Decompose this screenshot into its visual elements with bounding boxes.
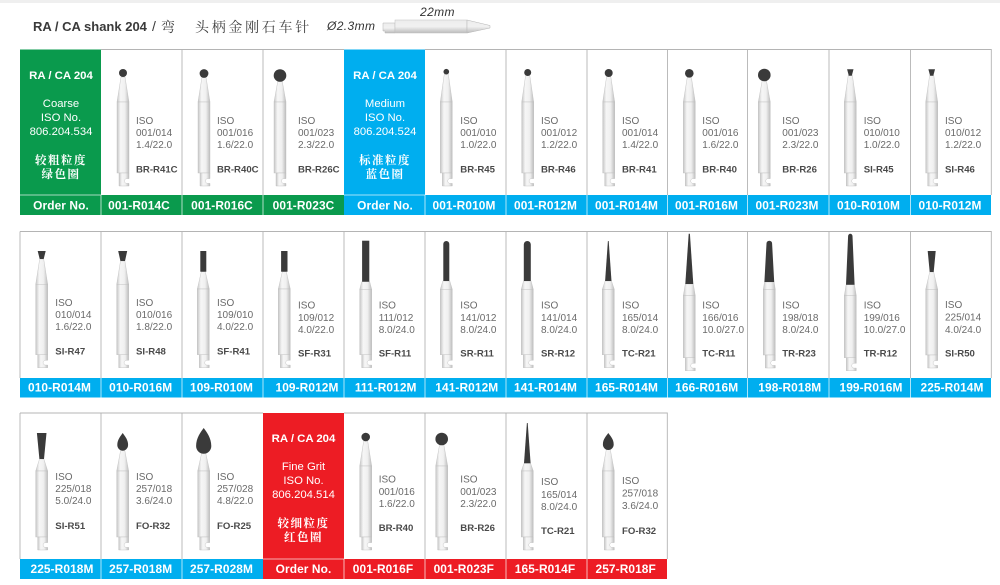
bur BR-R26 fine: 001/023 (460, 487, 497, 498)
bur BR-R41C (117, 69, 178, 186)
bur FO-R32 (117, 433, 173, 550)
bur BR-R40C: 001/016 (217, 128, 254, 139)
bur BR-R26 fine (435, 433, 497, 550)
bur SF-R31 (278, 251, 335, 368)
bur BR-R40C: BR-R40C (217, 165, 259, 176)
order number bar: medium: 001-R023M (755, 198, 819, 212)
bur BR-R40: 1.6/22.0 (702, 140, 739, 151)
order number bar: row 2: 109-R012M (275, 380, 339, 394)
bur BR-R40C (198, 69, 259, 186)
bur SR-R12: SR-R12 (541, 349, 575, 360)
bur TR-R12 (844, 234, 906, 371)
bur SI-R46: 1.2/22.0 (945, 140, 982, 151)
order number bar: row 2: 198-R018M (758, 380, 821, 394)
bur BR-R41 (603, 69, 659, 186)
bur FO-R32 fine: 3.6/24.0 (622, 501, 659, 512)
bur BR-R41C: ISO (136, 116, 153, 127)
bur SI-R46: SI-R46 (945, 165, 975, 176)
bur SR-R11: SR-R11 (460, 349, 495, 360)
bur BR-R41: 1.4/22.0 (622, 140, 659, 151)
panel: row 1 coarse and medium burs (20, 50, 991, 215)
bur BR-R26C: ISO (298, 116, 315, 127)
panel: coarse header: ISO No. (41, 112, 81, 124)
bur SR-R11: 141/012 (460, 313, 497, 324)
bur TC-R21 fine: 165/014 (541, 490, 578, 501)
bur SR-R12 (521, 241, 578, 368)
order number bar: medium: 001-R012M (514, 198, 577, 212)
bur BR-R26: BR-R26 (782, 165, 817, 176)
panel: fine grit header: 较细粒度 (278, 516, 330, 530)
bur SI-R51: 5.0/24.0 (55, 496, 92, 507)
order number bar: row 3 fine (344, 559, 667, 579)
bur BR-R40: 001/016 (702, 128, 739, 139)
order number bar: row 2: 010-R014M (28, 380, 91, 394)
bur BR-R41C: BR-R41C (136, 165, 178, 176)
bur BR-R40 fine: 001/016 (379, 487, 415, 498)
bur SI-R46: 010/012 (945, 128, 982, 139)
bur FO-R25: ISO (217, 472, 234, 483)
order number bar: row 2: 141-R012M (435, 380, 498, 394)
bur SI-R47: 1.6/22.0 (55, 322, 92, 333)
bur SF-R11: 8.0/24.0 (379, 325, 415, 336)
bur SI-R50 (926, 251, 982, 368)
order number bar: row 3 medium: 257-R028M (190, 562, 253, 576)
bur BR-R45: 001/010 (460, 128, 497, 139)
bur TC-R21: ISO (622, 300, 639, 312)
order number bar: row 3 fine: 257-R018F (596, 562, 656, 576)
bur SI-R45 (844, 69, 900, 186)
bur BR-R26 fine: ISO (460, 475, 478, 486)
icon: horizontal shank diagram (383, 20, 490, 33)
bur SF-R31: SF-R31 (298, 349, 332, 360)
panel: medium header: Order No. (357, 198, 413, 212)
bur TC-R21 fine: TC-R21 (541, 526, 575, 537)
panel: fine grit header: ISO No. (283, 475, 324, 487)
bur TC-R21 fine: 8.0/24.0 (541, 502, 578, 513)
bur TR-R12: 10.0/27.0 (864, 325, 906, 336)
bur SI-R45: ISO (864, 116, 881, 127)
bur SF-R31: ISO (298, 300, 315, 312)
panel: fine grit header: 806.204.514 (272, 489, 335, 501)
order number bar: medium: 001-R014M (595, 198, 658, 212)
bur SI-R50: SI-R50 (945, 349, 975, 360)
bur FO-R32: 3.6/24.0 (136, 496, 173, 507)
bur BR-R46: 001/012 (541, 128, 578, 139)
panel: fine grit header: RA / CA 204 (272, 433, 336, 445)
title: 弯 (161, 20, 175, 36)
bur TR-R12: 199/016 (864, 313, 900, 324)
shank length label: 22mm (419, 5, 455, 19)
bur SF-R11: 111/012 (379, 313, 414, 324)
bur BR-R40: ISO (702, 116, 720, 127)
panel: coarse header: Coarse (43, 98, 79, 110)
order number bar: coarse: 001-R016C (191, 198, 253, 212)
order number bar: row 3 medium: 257-R018M (109, 562, 172, 576)
order number bar: row 3 medium (20, 559, 263, 579)
order number bar: medium: 010-R012M (918, 198, 982, 212)
bur SR-R11: 8.0/24.0 (460, 325, 497, 336)
bur BR-R46: ISO (541, 116, 558, 127)
bur BR-R45: ISO (460, 116, 478, 127)
order number bar: medium: 001-R016M (675, 198, 738, 212)
bur BR-R40 (683, 69, 739, 186)
bur TR-R23 (763, 241, 819, 368)
bur FO-R32 fine: 257/018 (622, 488, 659, 500)
bur SR-R11: ISO (460, 300, 478, 312)
bur TR-R23: 198/018 (782, 313, 819, 324)
bur TC-R21: TC-R21 (622, 349, 656, 360)
bur BR-R26: 001/023 (782, 128, 819, 139)
bur FO-R32: ISO (136, 472, 153, 483)
bur BR-R26C (274, 69, 340, 186)
bur BR-R40: BR-R40 (702, 165, 737, 176)
bur SI-R45: 1.0/22.0 (864, 140, 900, 151)
bur SF-R11 (360, 241, 415, 368)
panel: coarse header: Order No. (33, 198, 89, 212)
bur SF-R41: ISO (217, 298, 234, 309)
bur TC-R11: 166/016 (702, 313, 739, 324)
bur SI-R48: 1.8/22.0 (136, 322, 173, 333)
bur FO-R25: 4.8/22.0 (217, 496, 254, 507)
bur TC-R21 fine (521, 423, 578, 550)
bur SI-R51: ISO (55, 472, 73, 483)
bur FO-R32 fine: FO-R32 (622, 526, 656, 537)
bur SF-R41: 4.0/22.0 (217, 322, 254, 333)
order number bar: medium: 001-R010M (432, 198, 496, 212)
order number bar: coarse (101, 195, 344, 215)
panel: medium header: RA / CA 204 (353, 70, 418, 82)
bur SI-R51 (36, 433, 92, 550)
order number bar: row 2: 199-R016M (839, 380, 903, 394)
bur BR-R46 (522, 69, 578, 186)
bur SF-R41: 109/010 (217, 310, 254, 321)
panel: coarse header: 806.204.534 (30, 126, 92, 138)
bur SI-R48: ISO (136, 298, 153, 309)
order number bar: medium (425, 195, 991, 215)
bur TR-R23: 8.0/24.0 (782, 325, 819, 336)
bur BR-R26: 2.3/22.0 (782, 140, 819, 151)
order number bar: row 2: 141-R014M (514, 380, 577, 394)
bur BR-R40C: 1.6/22.0 (217, 140, 254, 151)
bur SR-R11 (440, 241, 497, 368)
bur SI-R45: 010/010 (864, 128, 900, 139)
panel: medium header: ISO No. (365, 112, 405, 124)
bur SF-R31: 109/012 (298, 313, 335, 324)
panel: medium header: 标准粒度 (359, 153, 411, 167)
bur TC-R11: TC-R11 (702, 349, 736, 360)
bur FO-R32 fine (602, 433, 659, 550)
order number bar: row 2: 165-R014M (595, 380, 658, 394)
bur SI-R50: ISO (945, 300, 962, 311)
bur BR-R40C: ISO (217, 116, 234, 127)
bur BR-R46: BR-R46 (541, 165, 576, 176)
bur TR-R23: TR-R23 (782, 349, 816, 360)
bur SF-R11: ISO (379, 300, 396, 312)
shank diameter label: Ø2.3mm (326, 19, 375, 33)
bur SI-R47: ISO (55, 298, 73, 309)
panel: fine grit header: 红色圈 (284, 530, 323, 544)
bur SI-R50: 4.0/24.0 (945, 325, 982, 336)
order number bar: row 3 fine: 001-R023F (434, 562, 494, 576)
panel: medium header: 806.204.524 (354, 126, 416, 138)
bur BR-R40 fine (360, 433, 415, 550)
bur SF-R41 (197, 251, 254, 368)
bur SI-R46: ISO (945, 116, 962, 127)
panel: coarse header: 绿色圈 (42, 167, 80, 181)
order number bar: row 3 fine: 165-R014F (515, 562, 575, 576)
bur BR-R26 fine: BR-R26 (460, 523, 495, 534)
order number bar: row 2: 010-R016M (109, 380, 172, 394)
bur FO-R32 fine: ISO (622, 476, 639, 487)
title: / (152, 18, 156, 34)
panel: coarse header (20, 50, 101, 215)
bur BR-R41C: 001/014 (136, 128, 173, 139)
panel: medium header (344, 50, 425, 215)
bur TC-R11: 10.0/27.0 (702, 325, 744, 336)
title: RA / CA shank 204 (33, 19, 148, 34)
panel: coarse header: RA / CA 204 (29, 70, 94, 82)
bur TR-R23: ISO (782, 300, 800, 312)
bur FO-R32: 257/018 (136, 484, 173, 495)
order number bar: row 3 fine: 001-R016F (353, 562, 413, 576)
bur TR-R12: ISO (864, 300, 881, 312)
order number bar: row 2: 109-R010M (190, 380, 253, 394)
bur TC-R21 (602, 241, 659, 368)
panel: medium header: Medium (365, 98, 405, 110)
panel: row 2 medium burs (20, 232, 991, 398)
bur TR-R12: TR-R12 (864, 349, 897, 360)
title (33, 18, 312, 36)
panel: coarse header: 较粗粒度 (35, 153, 87, 167)
bur SR-R12: 141/014 (541, 313, 578, 324)
bur SI-R47: 010/014 (55, 310, 92, 321)
bur SF-R11: SF-R11 (379, 349, 412, 360)
bur FO-R25: FO-R25 (217, 521, 252, 532)
bur BR-R41: 001/014 (622, 128, 659, 139)
bur SI-R47: SI-R47 (55, 347, 85, 358)
panel: fine grit header (263, 413, 344, 579)
bur BR-R26: ISO (782, 116, 800, 127)
bur SR-R12: 8.0/24.0 (541, 325, 578, 336)
bur BR-R45 (440, 69, 497, 186)
bur BR-R46: 1.2/22.0 (541, 140, 578, 151)
order number bar: medium: 010-R010M (837, 198, 900, 212)
order number bar: coarse: 001-R014C (108, 198, 170, 212)
panel: fine grit header: Order No. (276, 562, 331, 576)
bur TC-R21: 8.0/24.0 (622, 325, 659, 336)
bur FO-R25 (196, 428, 254, 550)
order number bar: row 2: 111-R012M (355, 380, 417, 394)
bur SI-R46 (926, 69, 982, 186)
bur SI-R51: 225/018 (55, 484, 92, 495)
order number bar: row 2: 225-R014M (920, 380, 984, 394)
bur SI-R50: 225/014 (945, 312, 982, 324)
order number bar: row 3 medium: 225-R018M (30, 562, 94, 576)
bur SI-R48: SI-R48 (136, 347, 167, 358)
bur BR-R40 fine: 1.6/22.0 (379, 499, 415, 510)
bur SF-R41: SF-R41 (217, 347, 251, 358)
panel: fine grit header: Fine Grit (282, 461, 326, 473)
bur SR-R12: ISO (541, 300, 558, 312)
bur TC-R11: ISO (702, 300, 720, 312)
bur SF-R31: 4.0/22.0 (298, 325, 335, 336)
bur BR-R40 fine: ISO (379, 475, 396, 486)
bur SI-R48 (117, 251, 173, 368)
order number bar: coarse: 001-R023C (273, 198, 335, 212)
bur TC-R11 (683, 234, 744, 371)
bur SI-R51: SI-R51 (55, 521, 86, 532)
bur SI-R45: SI-R45 (864, 165, 894, 176)
bur BR-R26C: BR-R26C (298, 165, 340, 176)
order number bar: row 2: 166-R016M (675, 380, 738, 394)
bur TC-R21 fine: ISO (541, 477, 558, 488)
bur BR-R45: BR-R45 (460, 165, 496, 176)
order number bar: row 2 (20, 378, 991, 398)
bur FO-R32: FO-R32 (136, 521, 170, 532)
bur SI-R47 (36, 251, 92, 368)
bur BR-R45: 1.0/22.0 (460, 140, 497, 151)
bur FO-R25: 257/028 (217, 484, 254, 495)
bur BR-R41: BR-R41 (622, 165, 657, 176)
bur BR-R41C: 1.4/22.0 (136, 140, 173, 151)
bur BR-R26 fine: 2.3/22.0 (460, 499, 497, 510)
bur TC-R21: 165/014 (622, 313, 659, 324)
bur BR-R40 fine: BR-R40 (379, 523, 413, 534)
bur BR-R41: ISO (622, 116, 639, 127)
bur BR-R26C: 001/023 (298, 128, 335, 139)
bur BR-R26 (758, 69, 819, 186)
bur SI-R48: 010/016 (136, 310, 173, 321)
panel: medium header: 蓝色圈 (366, 167, 404, 181)
panel: row 3 medium and fine burs (20, 413, 667, 579)
title: 头柄金刚石车针 (195, 19, 312, 36)
bur BR-R26C: 2.3/22.0 (298, 140, 335, 151)
